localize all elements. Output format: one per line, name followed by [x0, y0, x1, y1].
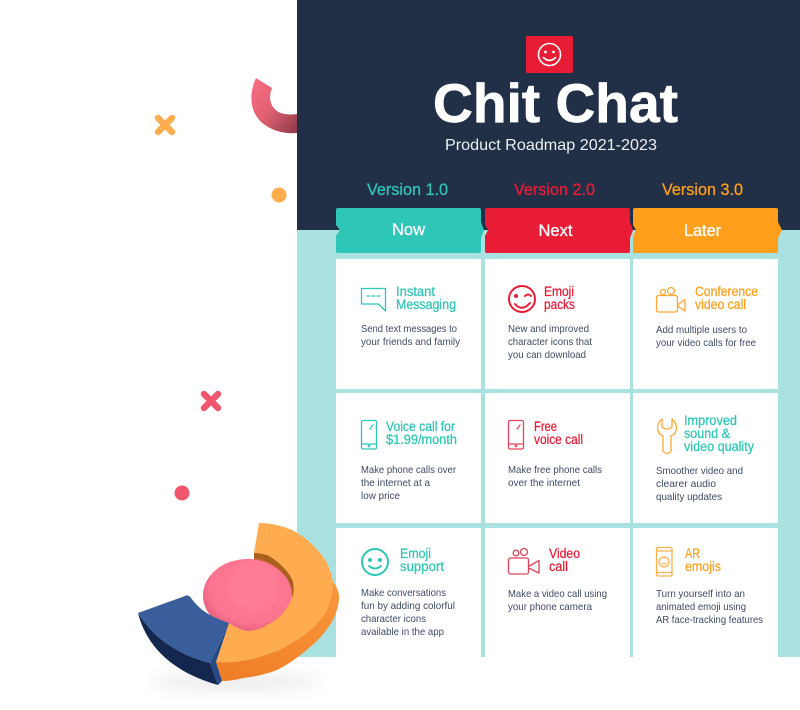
heading: Video [549, 546, 580, 561]
description: you can download [508, 349, 586, 361]
icon: chat bubble [362, 288, 386, 311]
heading: Voice call for [386, 419, 455, 434]
column heading: Version 2.0: Version 2.0 [514, 180, 595, 199]
heading: sound & [684, 426, 730, 441]
heading: emojis [685, 559, 721, 574]
ribbon: Now: Now [392, 220, 426, 239]
description [656, 324, 756, 349]
heading [695, 284, 758, 312]
illustration: 3D donut chart [138, 523, 339, 687]
heading: $1.99/month [386, 432, 457, 447]
description [656, 465, 743, 503]
decorative red dot [174, 486, 190, 500]
heading [396, 284, 456, 312]
card: Voice call for $1.99/month [336, 393, 481, 523]
description: available in the app [361, 626, 444, 638]
column heading: Version 1.0: Version 1.0 [367, 180, 448, 199]
heading: Emoji [400, 546, 431, 561]
decorative orange dot [272, 188, 286, 202]
description [508, 323, 592, 361]
card: Free voice call [485, 393, 630, 523]
description: character icons that [508, 336, 592, 348]
subtitle: Product Roadmap 2021-2023 [445, 137, 657, 154]
heading: video quality [684, 439, 754, 454]
description: Make conversations [361, 587, 446, 599]
description: Make free phone calls [508, 464, 602, 476]
ribbon: Next [485, 208, 633, 253]
ribbon: Later: Later [684, 221, 721, 240]
card: AR emojis [633, 528, 778, 657]
card: Video call [485, 528, 630, 657]
description [508, 464, 602, 489]
icon: video camera [508, 548, 539, 574]
description: Add multiple users to [656, 324, 747, 336]
description: your friends and family [361, 336, 461, 348]
icon: smiling face [362, 549, 388, 575]
description: Turn yourself into an [656, 588, 745, 600]
description: character icons [361, 613, 426, 625]
card: Improved sound and video quality [633, 393, 778, 523]
description: Make a video call using [508, 588, 607, 600]
description [361, 323, 461, 348]
card: Instant Messaging [336, 259, 481, 389]
icon: wrench [658, 419, 676, 454]
icon: phone [362, 420, 376, 449]
heading: Messaging [396, 297, 456, 312]
heading: Free [534, 419, 557, 434]
description [361, 587, 455, 638]
heading: Conference [695, 284, 758, 299]
heading [684, 413, 754, 454]
logo: red smiley badge [526, 36, 573, 73]
description: animated emoji using [656, 601, 746, 613]
heading: support [400, 559, 444, 574]
icon: phone with emoji [656, 548, 672, 576]
heading: packs [544, 297, 575, 312]
heading: AR [685, 546, 700, 561]
heading [534, 419, 583, 447]
description: Make phone calls over [361, 464, 456, 476]
heading: Emoji [544, 284, 574, 299]
description: low price [361, 490, 400, 502]
header band [297, 0, 800, 230]
description: AR face-tracking features [656, 614, 763, 626]
icon: video camera [656, 288, 685, 312]
ribbon: Next: Next [538, 221, 573, 240]
heading [400, 546, 444, 574]
description [361, 464, 456, 502]
description: New and improved [508, 323, 589, 335]
description: clearer audio [656, 478, 716, 490]
decorative pink arc [251, 78, 297, 133]
heading: call [549, 559, 568, 574]
heading: video call [695, 297, 746, 312]
title: Chit Chat [433, 72, 678, 134]
card: Conference video call [633, 259, 778, 389]
description: Send text messages to [361, 323, 457, 335]
ribbon: Later [633, 208, 782, 253]
ribbon: Now [336, 208, 484, 253]
description: your phone camera [508, 601, 592, 613]
decorative red cross [204, 394, 218, 408]
heading: voice call [534, 432, 583, 447]
icon: winking face [509, 286, 535, 312]
description: over the internet [508, 477, 580, 489]
description [656, 588, 763, 626]
description: the internet at a [361, 477, 430, 489]
card: Emoji packs [485, 259, 630, 389]
heading: Instant [396, 284, 435, 299]
panel: roadmap background [297, 0, 800, 657]
heading [544, 284, 575, 312]
heading [549, 546, 580, 574]
card: Emoji support [336, 528, 481, 657]
description: quality updates [656, 491, 722, 503]
column heading: Version 3.0: Version 3.0 [662, 180, 743, 199]
heading [685, 546, 721, 574]
description: your video calls for free [656, 337, 756, 349]
description [508, 588, 607, 613]
description: fun by adding colorful [361, 600, 455, 612]
heading [386, 419, 457, 447]
description: Smoother video and [656, 465, 743, 477]
decorative orange cross [158, 118, 172, 132]
heading: Improved [684, 413, 737, 428]
icon: phone [508, 420, 524, 449]
